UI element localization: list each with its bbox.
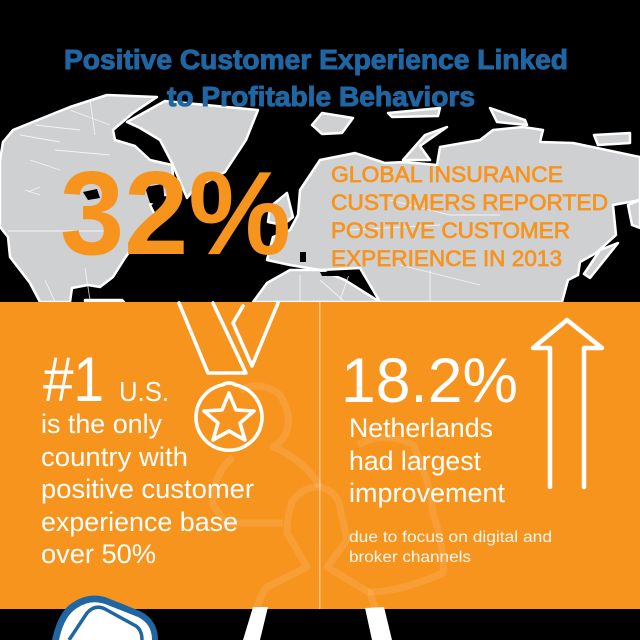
arrow: upward: [533, 320, 602, 487]
text: U.S. description: country with: [41, 442, 188, 472]
icon: blue badge: [52, 595, 158, 640]
statistic description: EXPERIENCE IN 2013: [331, 246, 562, 271]
sea inside North Atlantic: [145, 184, 165, 205]
icon: white person outline right: [365, 607, 392, 640]
title: Positive Customer Experience Linked: [64, 44, 568, 75]
statistic description: CUSTOMERS REPORTED: [331, 190, 608, 215]
text: U.S. description: over 50%: [41, 539, 156, 569]
text: Netherlands description: Netherlands: [349, 413, 493, 443]
big statistic: 32%: 32%: [60, 147, 291, 280]
stat: #1 U.S.: [43, 345, 169, 415]
stat: 18.2%: 18.2%: [341, 346, 518, 416]
world map: [0, 95, 640, 302]
sea inside North America: [83, 189, 100, 200]
map detail lines: [8, 100, 500, 302]
faded people icon: [213, 386, 443, 608]
text: U.S. description: experience base: [41, 507, 238, 537]
text: U.S. description: is the only: [41, 409, 162, 439]
text: Netherlands description: [349, 413, 505, 508]
stat: #1 U.S.: U.S.: [119, 376, 169, 407]
stat: #1 U.S.: #1: [43, 345, 104, 415]
text: Netherlands description: improvement: [349, 478, 505, 508]
panel: orange stats band: [0, 302, 640, 609]
title: to Profitable Behaviors: [167, 81, 475, 112]
text: Netherlands description: had largest: [349, 446, 481, 476]
Caspian sea and Mediterranean: [300, 252, 362, 276]
text: U.S. description: [41, 409, 254, 569]
icon: white person outline left: [243, 607, 268, 640]
medal icon: [179, 303, 278, 450]
divider: [319, 302, 320, 609]
text: Netherlands note: due to focus on digital and: [349, 529, 552, 546]
statistic description: [331, 162, 608, 271]
statistic description: POSITIVE CUSTOMER: [331, 218, 570, 243]
statistic description: GLOBAL INSURANCE: [331, 162, 563, 187]
title: [64, 44, 568, 112]
text: Netherlands note: broker channels: [349, 549, 471, 566]
text: U.S. description: positive customer: [41, 474, 254, 504]
text: Netherlands note: [349, 529, 552, 566]
